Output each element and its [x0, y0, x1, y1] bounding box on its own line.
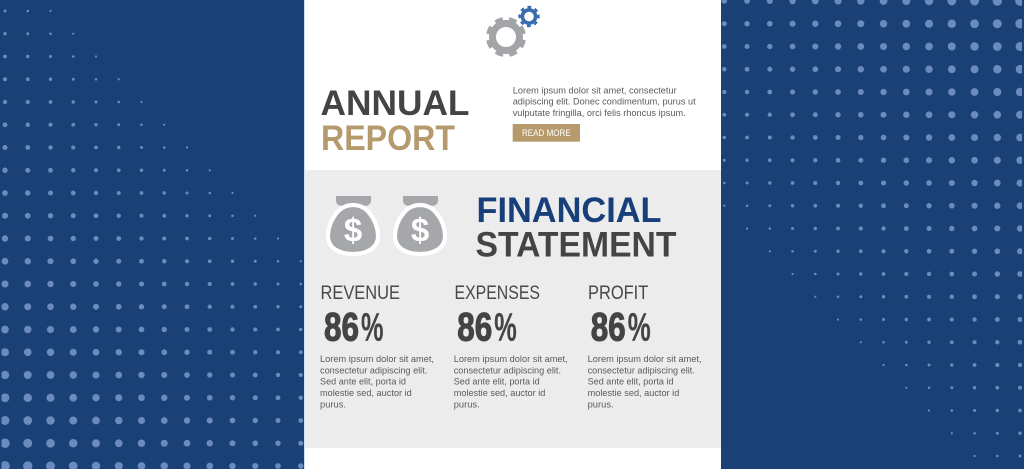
column: expenses: Sed ante elit, porta id — [454, 377, 540, 388]
intro text: adipiscing elit. Donec condimentum, purus ut — [513, 97, 696, 108]
column: profit: consectetur adipiscing elit. — [588, 365, 695, 376]
icon: gears — [485, 5, 540, 58]
column: profit: Sed ante elit, porta id — [588, 377, 674, 388]
column: revenue: % — [361, 306, 384, 350]
icon: money bag 2: $ — [411, 212, 429, 248]
column: expenses: EXPENSES — [454, 282, 540, 304]
heading: financial statement: STATEMENT — [476, 226, 676, 265]
column: expenses: consectetur adipiscing elit. — [454, 365, 561, 376]
heading: financial statement — [476, 191, 676, 265]
panel left edge highlight — [304, 0, 305, 469]
title: annual report: REPORT — [321, 119, 455, 158]
column: revenue: REVENUE — [320, 282, 400, 304]
column: revenue: purus. — [320, 399, 346, 410]
column: profit: 86 — [591, 306, 626, 350]
column: expenses — [454, 282, 568, 410]
column: expenses: molestie sed, auctor id — [454, 388, 545, 399]
left halftone dot pattern — [5, 11, 304, 469]
title: annual report: ANNUAL — [320, 84, 470, 123]
intro text — [513, 85, 696, 119]
panel: financial statement background — [305, 170, 721, 448]
read more button: READ MORE — [522, 128, 571, 139]
column: profit: molestie sed, auctor id — [588, 388, 679, 399]
column: expenses: 86 — [457, 306, 492, 350]
column: expenses: Lorem ipsum dolor sit amet, — [454, 354, 568, 365]
icon: money bag 1: $ — [344, 212, 362, 248]
column: profit: purus. — [588, 399, 614, 410]
icon: money bag 2 — [395, 196, 445, 254]
intro text: Lorem ipsum dolor sit amet, consectetur — [513, 85, 677, 96]
column: revenue: molestie sed, auctor id — [320, 388, 412, 399]
column: revenue: Sed ante elit, porta id — [320, 377, 406, 388]
column: profit: PROFIT — [588, 282, 648, 304]
column: revenue: consectetur adipiscing elit. — [320, 365, 427, 376]
right halftone dot pattern — [724, 1, 1022, 469]
column: revenue: 86 — [324, 306, 359, 350]
column: revenue — [320, 282, 434, 410]
intro text: vulputate fringilla, orci felis rhoncus ipsum. — [513, 108, 686, 119]
column: expenses: % — [494, 306, 517, 350]
centre white panel — [304, 0, 721, 469]
read more button — [513, 124, 580, 142]
column: profit: Lorem ipsum dolor sit amet, — [588, 354, 702, 365]
icon: money bag 1 — [328, 196, 378, 254]
column: profit — [588, 282, 702, 410]
column: expenses: purus. — [454, 399, 480, 410]
column: profit: % — [628, 306, 651, 350]
column: revenue: Lorem ipsum dolor sit amet, — [320, 354, 434, 365]
title: annual report — [320, 84, 470, 158]
heading: financial statement: FINANCIAL — [476, 191, 662, 230]
